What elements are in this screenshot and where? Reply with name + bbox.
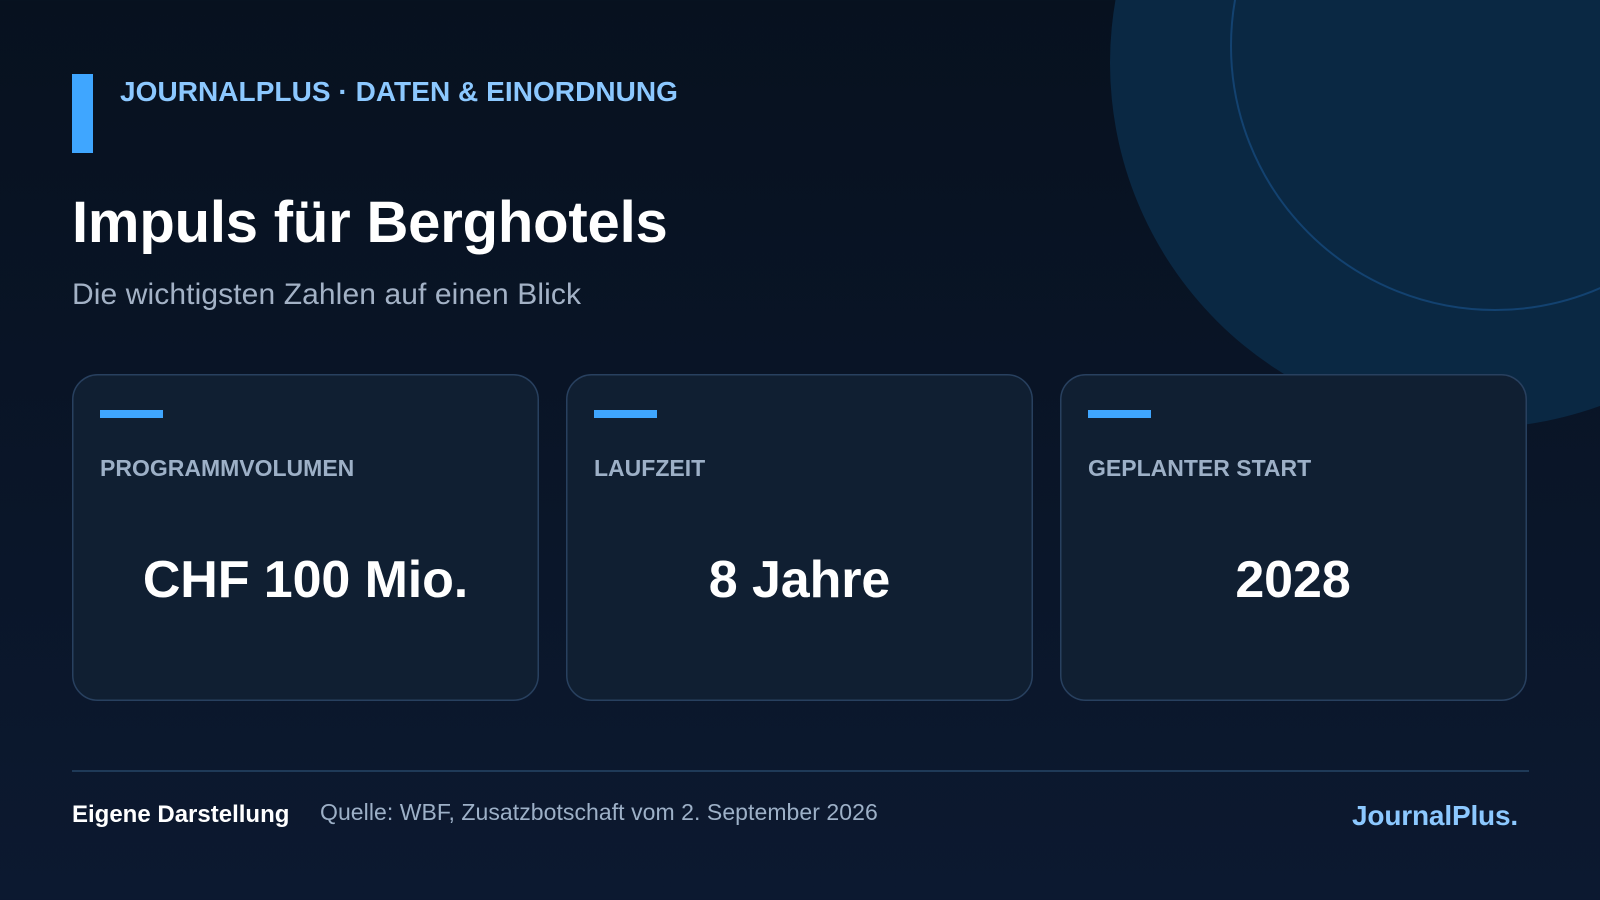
- card accent: [100, 410, 163, 418]
- background circle: large: [1110, 0, 1600, 428]
- card label: PROGRAMMVOLUMEN: [100, 455, 354, 481]
- panel: Programmvolumen: [72, 374, 539, 701]
- footer: source: Quelle: WBF, Zusatzbotschaft vom 2. September 2026: [320, 799, 878, 825]
- card label: GEPLANTER START: [1088, 455, 1311, 481]
- card label: LAUFZEIT: [594, 455, 705, 481]
- footer: brand: JournalPlus.: [1352, 800, 1518, 831]
- title: Impuls für Berghotels: [72, 190, 668, 255]
- card value: 2028: [1235, 551, 1351, 609]
- card accent: [1088, 410, 1151, 418]
- eyebrow: JOURNALPLUS · DATEN & EINORDNUNG: [120, 76, 678, 107]
- panel: Geplanter Start: [1060, 374, 1527, 701]
- card accent: [594, 410, 657, 418]
- panel: Laufzeit: [566, 374, 1033, 701]
- accent bar: [72, 74, 93, 153]
- background circle: outline: [1230, 0, 1600, 311]
- card value: 8 Jahre: [709, 551, 890, 609]
- subtitle: Die wichtigsten Zahlen auf einen Blick: [72, 278, 581, 311]
- card value: CHF 100 Mio.: [143, 551, 468, 609]
- footer: note: Eigene Darstellung: [72, 801, 289, 828]
